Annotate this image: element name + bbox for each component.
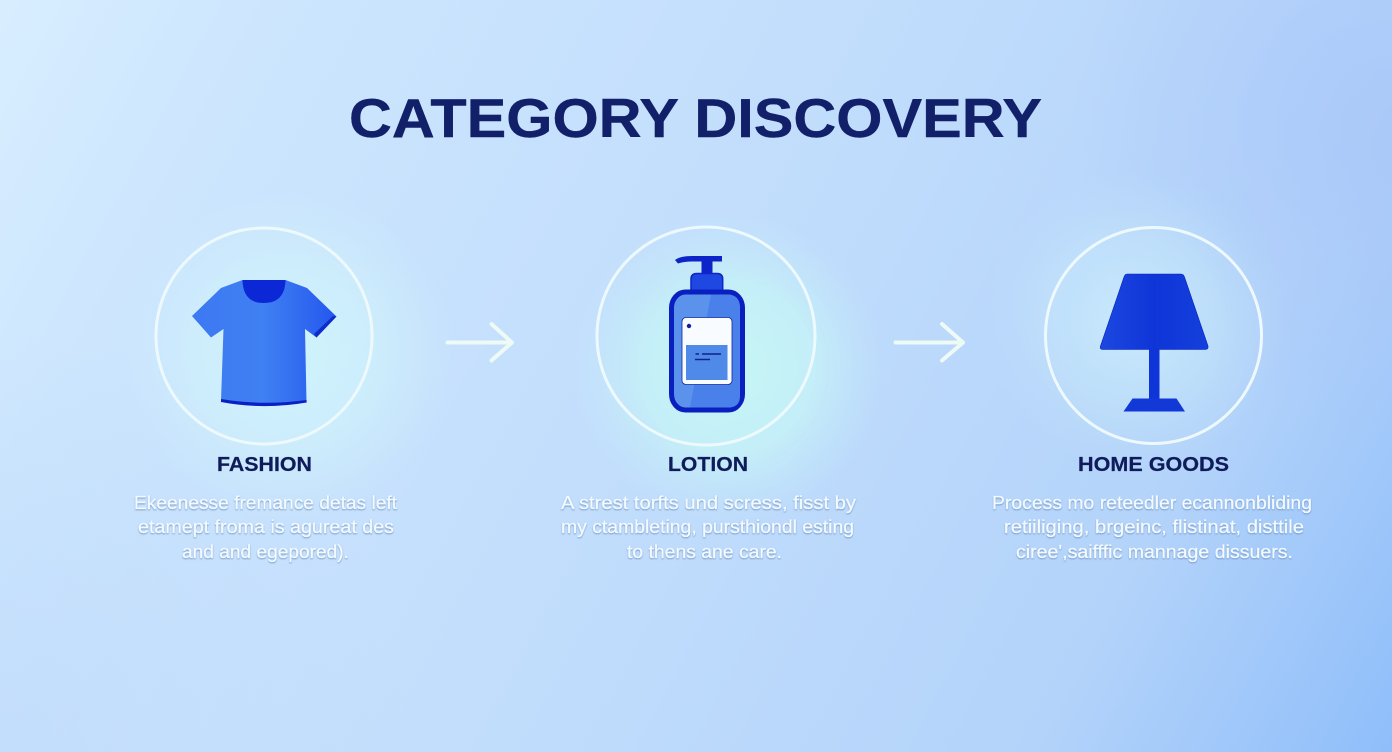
- icon: table lamp: [1100, 274, 1208, 412]
- icon: lotion bottle: [672, 256, 742, 410]
- panel: home goods: [985, 170, 1312, 562]
- circle: fashion: [156, 228, 372, 444]
- label: home goods: HOME GOODS: [1078, 454, 1229, 476]
- label: lotion: LOTION: [668, 454, 748, 476]
- circle: home goods: [1046, 228, 1262, 444]
- description: home goods: Process mo reteedler ecannonbliding: [992, 493, 1312, 513]
- bottle label: [682, 318, 732, 384]
- description: fashion: [134, 493, 397, 562]
- description: fashion: Ekeenesse fremance detas left: [134, 493, 397, 513]
- bottle body: [672, 292, 742, 410]
- description: home goods: retiiliging, brgeinc, flistinat, disttile: [1004, 517, 1304, 537]
- glow: home goods: [985, 170, 1285, 470]
- pump head: [675, 256, 722, 274]
- title: CATEGORY DISCOVERY: [349, 87, 1042, 149]
- label: fashion: FASHION: [217, 454, 312, 476]
- glow: fashion: [125, 190, 455, 520]
- icon: t-shirt: [192, 280, 336, 406]
- bottle collar: [691, 274, 723, 292]
- description: lotion: to thens ane care.: [627, 542, 782, 562]
- panel: fashion: [125, 190, 455, 562]
- circle: lotion: [597, 227, 815, 445]
- description: lotion: my ctambleting, pursthiondl esting: [561, 517, 854, 537]
- glow: lotion: [573, 213, 883, 523]
- arrow: fashion to lotion: [448, 324, 512, 360]
- panel: lotion: [561, 213, 883, 562]
- description: home goods: ciree',saifffic mannage dissuers.: [1016, 542, 1293, 562]
- description: home goods: [992, 493, 1312, 562]
- arrow: lotion to home goods: [896, 324, 963, 360]
- description: lotion: A strest torfts und scress, fisst by: [561, 493, 856, 513]
- description: fashion: and and egepored).: [182, 542, 349, 562]
- description: fashion: etamept froma is agureat des: [138, 517, 394, 537]
- description: lotion: [561, 493, 856, 562]
